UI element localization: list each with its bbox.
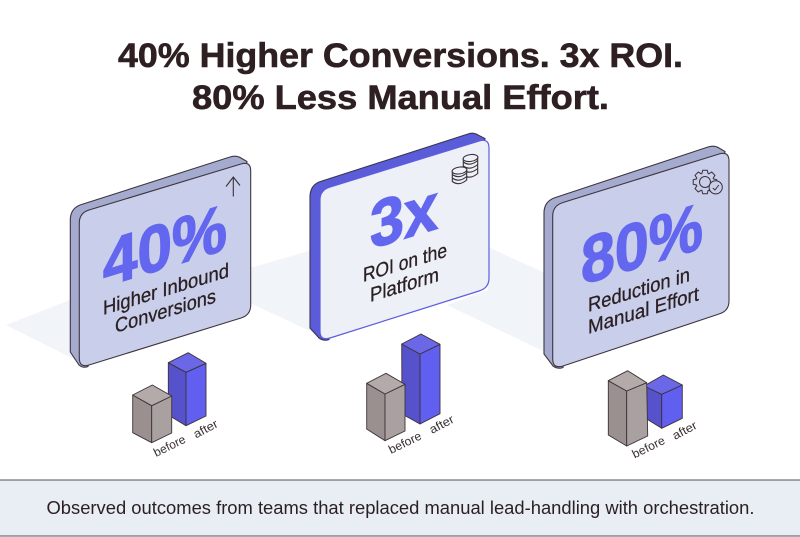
- panel: 40% higher inbound conversions: [70, 156, 251, 367]
- bar: before: [367, 373, 405, 441]
- axis labels: before: [630, 433, 668, 461]
- label: Reduction in Manual Effort: Reduction in: [588, 263, 690, 317]
- icon: coin stacks: [452, 154, 478, 184]
- bar: after: [402, 334, 440, 424]
- panel: 3x ROI on the platform: [310, 133, 489, 340]
- bar chart: manual effort before and after: [608, 371, 699, 461]
- bar: before: [133, 385, 172, 443]
- panel: 80% reduction in manual effort: [544, 146, 729, 368]
- icon: gear with check: [693, 170, 722, 194]
- bar: after: [168, 353, 206, 426]
- title: 40% Higher Conversions. 3x ROI.: [118, 37, 683, 75]
- axis labels: [386, 412, 456, 457]
- label: ROI on the Platform: [363, 239, 447, 307]
- axis labels: after: [670, 418, 699, 443]
- axis labels: before: [151, 432, 188, 460]
- footer text: Observed outcomes from teams that replaced manual lead-handling with orchestration.: [46, 498, 755, 518]
- axis labels: [630, 418, 699, 461]
- footer band: [0, 480, 800, 536]
- axis labels: before: [386, 429, 424, 457]
- bar: before: [608, 371, 648, 446]
- title: [118, 37, 683, 117]
- bar chart: ROI before and after: [367, 334, 456, 457]
- label: Higher Inbound Conversions: Higher Inbound: [103, 259, 229, 320]
- stat: 80%: 80%: [581, 189, 703, 300]
- label: Higher Inbound Conversions: Conversions: [115, 285, 216, 338]
- stat: 3x: 3x: [370, 169, 438, 264]
- stat: 40%: 40%: [103, 191, 227, 302]
- label: Reduction in Manual Effort: Manual Effort: [588, 282, 699, 339]
- axis labels: after: [427, 412, 456, 437]
- axis labels: after: [191, 417, 220, 441]
- icon: up arrow: [226, 177, 240, 196]
- label: ROI on the Platform: Platform: [370, 263, 439, 307]
- title: 80% Less Manual Effort.: [192, 79, 609, 117]
- axis labels: [151, 417, 220, 460]
- bar chart: conversions before and after: [133, 353, 220, 460]
- floor shadows: [6, 247, 545, 362]
- bar: after: [644, 375, 682, 428]
- label: ROI on the Platform: ROI on the: [363, 239, 447, 287]
- label: Higher Inbound Conversions: [103, 259, 229, 338]
